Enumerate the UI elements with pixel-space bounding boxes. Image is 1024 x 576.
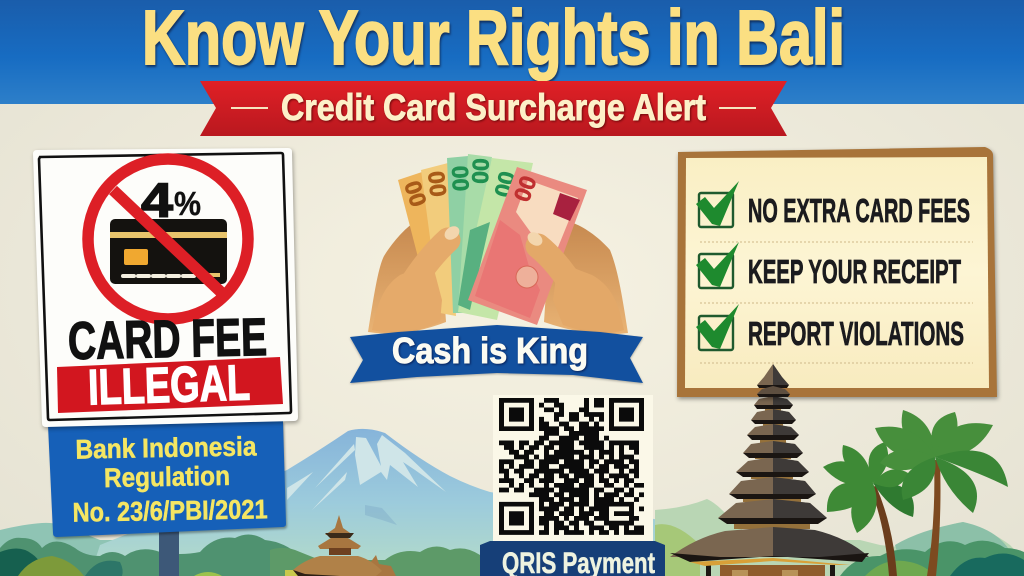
right hand back <box>544 223 628 334</box>
ribbon dash right <box>719 107 756 109</box>
credit card icon <box>110 219 227 284</box>
qr code panel <box>480 395 665 576</box>
main temple pagoda <box>670 364 869 576</box>
roof tiers light side <box>670 364 827 557</box>
right palm fronds <box>875 410 1008 513</box>
fee percentage <box>141 175 201 228</box>
tree line middle <box>270 546 500 576</box>
cash in hands illustration <box>368 154 628 334</box>
prohibition symbol <box>88 159 248 319</box>
cash is king ribbon: Cash is King <box>392 330 588 371</box>
regulation text <box>71 431 268 528</box>
card fee text: CARD FEE <box>67 308 268 371</box>
orange notes: 00 <box>399 178 432 210</box>
orange notes: 00 <box>423 170 452 198</box>
green notes: 00 <box>489 169 520 200</box>
checklist item 3 <box>696 304 964 352</box>
regulation text: No. 23/6/PBI/2021 <box>72 494 268 528</box>
roof eaves <box>670 385 869 562</box>
dotted rules <box>700 242 973 363</box>
tree line right <box>840 541 1024 576</box>
pale hills right <box>655 499 1024 576</box>
signpost pole <box>159 530 179 576</box>
green notes: 00 <box>467 158 494 184</box>
wooden bands <box>734 405 810 529</box>
small temple <box>293 515 396 576</box>
fee percentage: 4 <box>141 175 173 228</box>
subtitle text: Credit Card Surcharge Alert <box>281 87 706 128</box>
red note: 00 <box>509 172 542 205</box>
illegal banner: ILLEGAL <box>87 354 251 415</box>
regulation sign <box>48 421 286 537</box>
left hand thumb and palm <box>372 223 462 333</box>
checklist item 2 <box>696 242 961 290</box>
red note <box>468 167 587 325</box>
temple body <box>706 565 711 576</box>
illegal card fee sign <box>33 148 298 427</box>
qris payment banner <box>480 541 665 576</box>
landscape scenery <box>0 429 1024 576</box>
mountain <box>90 429 660 576</box>
gold trim <box>690 558 850 566</box>
temple spire over board <box>757 364 790 397</box>
subtitle ribbon <box>200 81 787 136</box>
pale hills left <box>0 523 300 576</box>
regulation text: Regulation <box>104 461 230 493</box>
green notes: 00 <box>447 165 474 192</box>
checklist item 1 <box>696 181 970 229</box>
checklist board <box>677 147 997 397</box>
green notes <box>447 154 533 320</box>
ribbon dash left <box>231 107 268 109</box>
left hand back <box>368 224 446 334</box>
blue header band <box>0 0 1024 104</box>
tree line left <box>0 534 300 576</box>
trunks <box>870 486 897 576</box>
palm trees <box>823 410 1008 576</box>
roof tiers dark side <box>773 364 869 557</box>
qr code <box>499 398 644 535</box>
fee percentage: % <box>174 185 201 222</box>
regulation text: Bank Indonesia <box>75 431 258 465</box>
orange notes <box>398 163 456 316</box>
right hand thumb and palm <box>525 229 624 333</box>
left palm fronds <box>823 442 914 533</box>
cash is king ribbon <box>350 325 643 383</box>
